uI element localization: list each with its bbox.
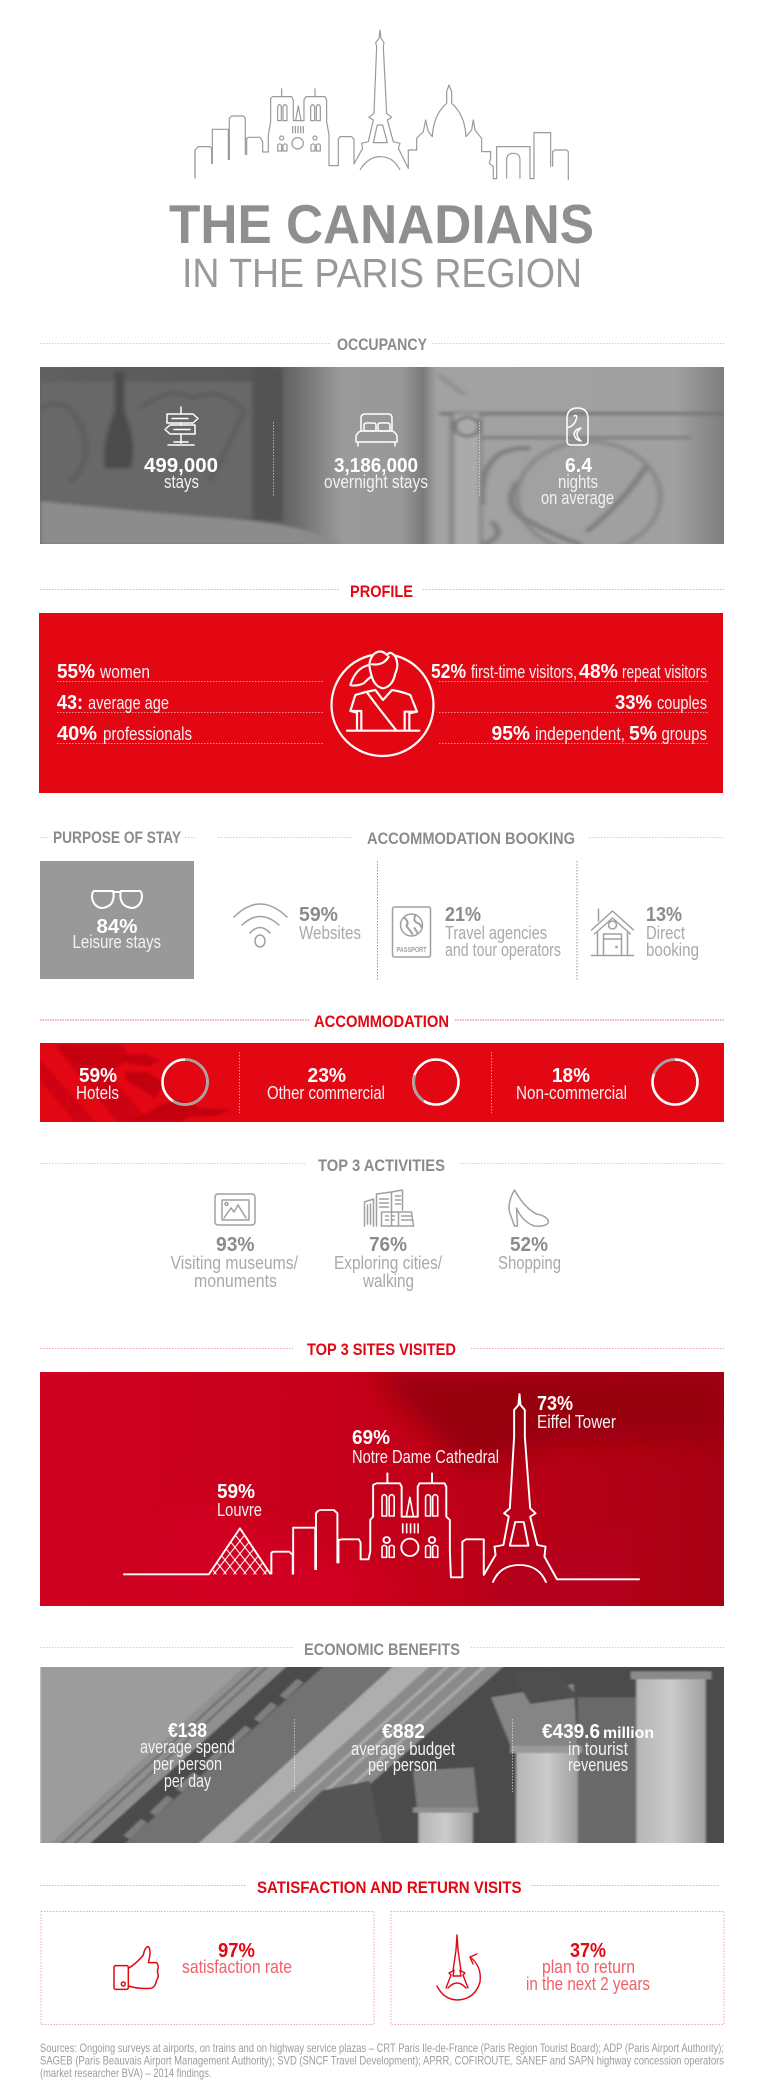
stat: average budget: €882 (382, 1721, 425, 1743)
skyline illustration (195, 30, 568, 180)
icon: bed (356, 414, 397, 446)
right stats: 95% (492, 723, 530, 745)
stat: stays (144, 407, 218, 492)
photo background: Bourse columns (40, 1664, 730, 1846)
right stats: 52% (431, 661, 466, 683)
right stats: 33% (615, 692, 652, 714)
icon: door hanger (567, 408, 588, 445)
activity: exploring cities (334, 1190, 442, 1291)
heading: top 3 sites visited: TOP 3 SITES VISITED (307, 1340, 456, 1359)
stat: average budget: average budget (351, 1739, 455, 1759)
left stats (57, 661, 192, 745)
title: IN THE PARIS REGION (182, 250, 582, 296)
activity: museums: monuments (194, 1271, 277, 1291)
stat: overnight stays: overnight stays (324, 472, 428, 492)
panel: satisfaction rate (41, 1912, 374, 2024)
left stats: 43: (57, 692, 83, 714)
title: THE CANADIANS (169, 193, 594, 255)
activity: exploring cities: Exploring cities/ (334, 1253, 442, 1273)
left stats: 40% (57, 723, 97, 745)
panel: satisfaction rate: satisfaction rate (182, 1957, 292, 1977)
right stats: couples (657, 693, 707, 713)
label: Notre Dame: 69% (352, 1427, 390, 1449)
activity: shopping: Shopping (498, 1253, 561, 1273)
heading: top 3 activities: TOP 3 ACTIVITIES (318, 1156, 445, 1175)
icon: house (592, 909, 634, 956)
stat: tourist revenues: revenues (568, 1755, 628, 1775)
activity: shopping: 52% (510, 1234, 548, 1256)
stat: other commercial: 23% (308, 1065, 346, 1087)
icon: passport: PASSPORT (396, 947, 427, 954)
panel: occupancy (40, 367, 730, 552)
panel: leisure stays (40, 861, 194, 979)
sources footnote: (market researcher BVA) – 2014 findings. (40, 2066, 212, 2080)
stat: tourist revenues: million (603, 1725, 654, 1742)
stat: average spend: per day (164, 1771, 211, 1791)
panel: accommodation (40, 1043, 724, 1122)
right stats: groups (662, 724, 707, 744)
activity: exploring cities: 76% (369, 1234, 407, 1256)
label: Louvre: Louvre (217, 1500, 262, 1520)
stat: tourist revenues: in tourist (568, 1739, 628, 1759)
stat: stays: 499,000 (144, 455, 218, 477)
icon: passport (392, 907, 430, 957)
title (169, 193, 594, 296)
stat: overnight stays (324, 414, 428, 492)
booking: direct (592, 904, 699, 960)
booking: websites (234, 904, 361, 947)
heading: economic benefits: ECONOMIC BENEFITS (304, 1640, 460, 1659)
icon: glasses (92, 891, 142, 908)
icon: woman in circle (332, 651, 434, 756)
booking: travel agencies (392, 904, 561, 960)
right stats: first-time visitors, (471, 662, 577, 682)
stat: stays: stays (164, 472, 199, 492)
booking: direct: 13% (646, 904, 682, 926)
world map texture (40, 1044, 232, 1122)
label: Eiffel Tower: 73% (537, 1393, 573, 1415)
stat: average spend: average spend (140, 1737, 235, 1757)
right stats: 48% (579, 661, 618, 683)
booking: direct: booking (646, 940, 699, 960)
label: Eiffel Tower: Eiffel Tower (537, 1412, 616, 1432)
stat: non-commercial: Non-commercial (516, 1083, 627, 1103)
heading: satisfaction and return visits: SATISFACTION AND RETURN VISITS (257, 1878, 522, 1897)
stat: hotels: 59% (79, 1065, 117, 1087)
icon: thumbs up (114, 1947, 158, 1989)
ring chart: 18% (652, 1060, 698, 1104)
activity: museums: 93% (216, 1234, 255, 1256)
stat: nights on average (541, 408, 614, 508)
panel: return visits: plan to return (542, 1957, 635, 1977)
panel: return visits: 37% (570, 1940, 606, 1962)
panel: leisure stays: Leisure stays (72, 932, 161, 952)
stat: average spend (140, 1720, 235, 1791)
icon: wifi (234, 904, 287, 947)
activity: shopping (498, 1190, 561, 1273)
stat: overnight stays: 3,186,000 (334, 455, 418, 477)
stat: hotels: Hotels (76, 1083, 119, 1103)
label: Eiffel Tower (537, 1393, 616, 1432)
icon: high heel (509, 1190, 548, 1226)
left stats: women (99, 662, 150, 682)
stat: other commercial: Other commercial (267, 1083, 385, 1103)
stat: tourist revenues: €439.6 (542, 1721, 600, 1743)
ring chart: 23% (414, 1060, 458, 1104)
activity: museums: Visiting museums/ (170, 1253, 298, 1273)
heading: purpose of stay: PURPOSE OF STAY (53, 828, 182, 847)
label: Notre Dame: Notre Dame Cathedral (352, 1447, 499, 1467)
left stats: average age (88, 693, 169, 713)
stat: non-commercial: 18% (552, 1065, 590, 1087)
stat: average budget: per person (368, 1755, 437, 1775)
stat: non-commercial (516, 1060, 698, 1104)
booking: websites: 59% (299, 904, 338, 926)
skyline with Louvre, Notre Dame and Eiffel Tower (123, 1394, 640, 1583)
photo background: bedroom (40, 367, 730, 552)
booking: direct: Direct (646, 923, 685, 943)
booking: travel agencies: 21% (445, 904, 481, 926)
stat: hotels (76, 1060, 208, 1104)
panel: economic benefits (40, 1664, 730, 1846)
stat: average spend: per person (153, 1754, 222, 1774)
icon: buildings (364, 1190, 414, 1226)
heading: occupancy: OCCUPANCY (337, 335, 428, 354)
icon: signpost (165, 407, 198, 445)
activity: museums (170, 1194, 298, 1291)
booking: travel agencies: Travel agencies (445, 923, 547, 943)
sources footnote (40, 2041, 724, 2080)
stat: nights on average: on average (541, 488, 614, 508)
right stats: independent, (535, 724, 625, 744)
heading: accommodation booking: ACCOMMODATION BOOKING (367, 829, 575, 848)
stat: tourist revenues (542, 1721, 654, 1775)
label: Notre Dame (352, 1427, 499, 1467)
activity: exploring cities: walking (362, 1271, 414, 1291)
icon: framed picture (215, 1194, 255, 1225)
label: Louvre: 59% (217, 1481, 255, 1503)
heading: accommodation: ACCOMMODATION (314, 1012, 449, 1031)
right stats (431, 661, 707, 745)
heading: profile: PROFILE (350, 582, 413, 601)
right stats: 5% (629, 723, 657, 745)
stat: average spend: €138 (168, 1720, 207, 1742)
booking: travel agencies: and tour operators (445, 940, 561, 960)
stat: nights on average: nights (558, 472, 598, 492)
panel: leisure stays: 84% (96, 916, 138, 938)
booking: websites: Websites (299, 923, 361, 943)
left stats: professionals (103, 724, 192, 744)
stat: other commercial (267, 1060, 458, 1104)
panel: return visits (391, 1912, 724, 2024)
panel: return visits: in the next 2 years (526, 1974, 650, 1994)
panel: profile (39, 613, 723, 793)
panel: satisfaction rate: 97% (218, 1940, 255, 1962)
panel: top 3 sites (40, 1372, 730, 1620)
stat: average budget (351, 1721, 455, 1775)
label: Louvre (217, 1481, 262, 1520)
icon: Eiffel Tower with return arrow (437, 1935, 480, 2000)
ring chart: 59% (162, 1060, 208, 1104)
right stats: repeat visitors (622, 662, 707, 682)
left stats: 55% (57, 661, 95, 683)
stat: nights on average: 6.4 (565, 455, 593, 477)
